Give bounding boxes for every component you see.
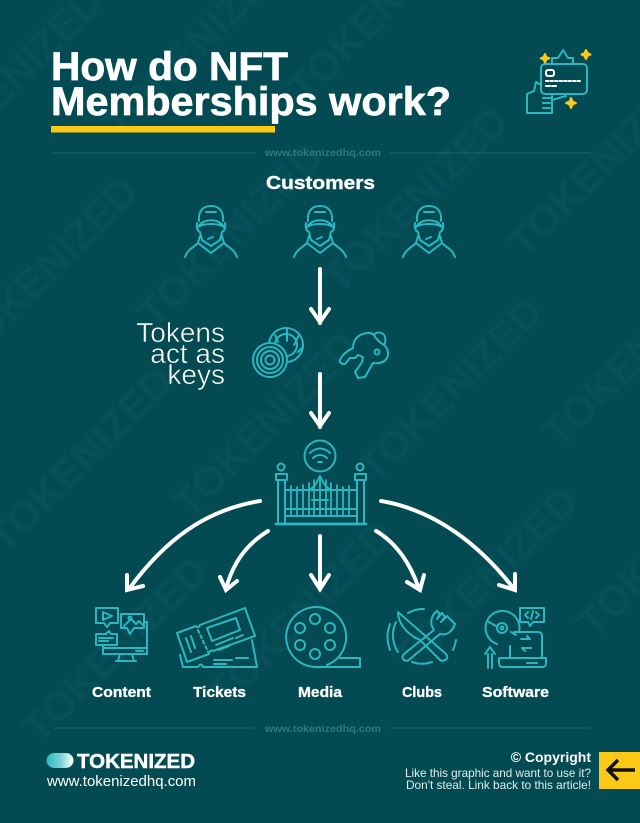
icon: tickets <box>177 608 257 667</box>
arrow: gate to clubs <box>376 531 424 590</box>
icon: film reel <box>286 607 360 667</box>
infographic canvas: TOKENIZED <box>313 97 517 301</box>
text: tokens act as keys: Tokens <box>136 317 225 348</box>
title: Memberships work? <box>51 80 451 124</box>
copyright note <box>405 749 591 792</box>
infographic canvas: TOKENIZED <box>163 322 367 526</box>
label: software: Software <box>482 684 549 701</box>
icon: token coins <box>253 328 303 377</box>
label: content: Content <box>92 684 151 701</box>
icon: card with thumbs up <box>527 50 590 113</box>
arrow: gate to media <box>311 536 329 589</box>
label: media: Media <box>298 684 343 701</box>
icon: content <box>96 608 147 661</box>
logo: TOKENIZED <box>77 750 195 773</box>
icon: customer right <box>403 206 455 257</box>
title <box>51 45 451 132</box>
icon: customer centre <box>294 206 346 257</box>
label: tickets: Tickets <box>193 684 246 701</box>
infographic canvas: TOKENIZED <box>13 547 217 751</box>
icon: wifi gate <box>276 440 366 524</box>
top divider with url: www.tokenizedhq.com <box>264 147 381 159</box>
label: clubs: Clubs <box>402 684 442 701</box>
infographic canvas: TOKENIZED <box>383 477 587 681</box>
title: How do NFT <box>51 45 288 89</box>
arrow: gate to tickets <box>220 531 268 590</box>
footer url: www.tokenizedhq.com <box>46 773 196 790</box>
icon: knife and fork <box>388 609 456 664</box>
copyright note: Don't steal. Link back to this article! <box>406 778 591 792</box>
arrow: customers to tokens <box>311 269 329 323</box>
text: tokens act as keys: keys <box>167 359 225 390</box>
bottom divider with url: www.tokenizedhq.com <box>264 723 381 735</box>
copyright note: Like this graphic and want to use it? <box>405 766 591 780</box>
yellow back arrow button <box>599 752 640 789</box>
icon: keys <box>340 333 388 378</box>
infographic canvas: TOKENIZED <box>348 287 552 491</box>
icon: software <box>485 608 546 668</box>
logo mark <box>47 753 74 768</box>
infographic canvas: TOKENIZED <box>198 512 402 716</box>
arrow: gate to software <box>381 501 515 590</box>
arrow: gate to content <box>127 501 260 590</box>
text: tokens act as keys: act as <box>150 338 225 369</box>
arrow: tokens to gate <box>311 374 329 427</box>
infographic canvas: TOKENIZED <box>128 132 332 336</box>
title underline <box>51 126 275 132</box>
heading: customers: Customers <box>266 172 375 193</box>
icon: customer left <box>185 206 237 257</box>
copyright note: © Copyright <box>511 749 591 765</box>
text: tokens act as keys <box>136 317 225 390</box>
